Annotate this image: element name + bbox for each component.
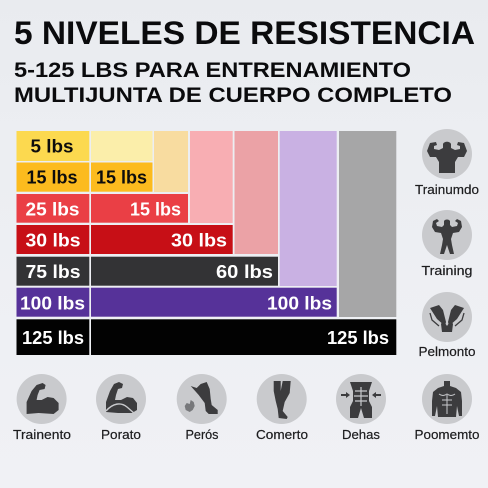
icon: torso bbox=[422, 374, 472, 424]
row: 15 lbs: 15 lbs bbox=[96, 166, 147, 187]
faded column: lilac bbox=[280, 131, 337, 286]
row: 75 lbs: 75 lbs bbox=[26, 261, 80, 282]
icon: front double biceps bbox=[422, 210, 472, 260]
faded column: tan bbox=[154, 131, 188, 192]
label: Trainumdo: Trainumdo bbox=[415, 183, 479, 197]
row: 25 lbs: 15 lbs bbox=[130, 198, 181, 220]
title: 5 NIVELES DE RESISTENCIA bbox=[14, 15, 475, 51]
row: 25 lbs: 25 lbs bbox=[26, 198, 80, 220]
icon: legs bbox=[257, 374, 307, 424]
subtitle: 5-125 LBS PARA ENTRENAMIENTO bbox=[14, 58, 411, 82]
label: Pelmonto: Pelmonto bbox=[418, 345, 476, 359]
row: 100 lbs: 100 lbs bbox=[267, 292, 332, 313]
row: 125 lbs: 125 lbs bbox=[327, 327, 389, 348]
row: 125 lbs: 125 lbs bbox=[22, 327, 84, 348]
faded column: pink bbox=[190, 131, 233, 223]
faded column: gray bbox=[339, 131, 396, 317]
icon: calf and foot bbox=[177, 374, 227, 424]
row: 75 lbs: 60 lbs bbox=[216, 261, 273, 282]
label: Comerto: Comerto bbox=[256, 428, 308, 442]
label: Porato: Porato bbox=[101, 428, 141, 442]
label: Training: Training bbox=[422, 264, 473, 278]
row: 30 lbs bbox=[16, 225, 233, 254]
row: 125 lbs bbox=[16, 319, 396, 355]
label: Perós: Perós bbox=[186, 428, 218, 442]
row: 15 lbs bbox=[16, 162, 152, 192]
row: 30 lbs: 30 lbs bbox=[26, 230, 80, 250]
row: 100 lbs: 100 lbs bbox=[20, 292, 85, 313]
subtitle: MULTIJUNTA DE CUERPO COMPLETO bbox=[14, 83, 452, 107]
row: 5 lbs: 5 lbs bbox=[30, 136, 74, 157]
resistance chart bbox=[16, 131, 396, 355]
faded column: rose bbox=[234, 131, 278, 254]
label: Trainento: Trainento bbox=[13, 428, 71, 442]
faded column: 15 lbs yellow bbox=[91, 131, 152, 161]
label: Dehas: Dehas bbox=[342, 428, 380, 442]
icon: flexed arm bbox=[17, 374, 67, 424]
icon: pelvic muscles bbox=[422, 292, 472, 342]
row: 30 lbs: 30 lbs bbox=[171, 230, 227, 250]
row: 5 lbs bbox=[16, 131, 89, 161]
icon: arm with tendon bbox=[96, 374, 146, 424]
row: 75 lbs bbox=[16, 257, 278, 286]
row: 15 lbs: 15 lbs bbox=[26, 166, 78, 187]
subtitle bbox=[14, 58, 452, 107]
row: 25 lbs bbox=[16, 194, 188, 223]
row: 100 lbs bbox=[16, 288, 337, 317]
label: Poomemto: Poomemto bbox=[414, 428, 480, 442]
icon: flexing back bbox=[422, 129, 472, 179]
icon: waist and abs bbox=[336, 374, 386, 424]
